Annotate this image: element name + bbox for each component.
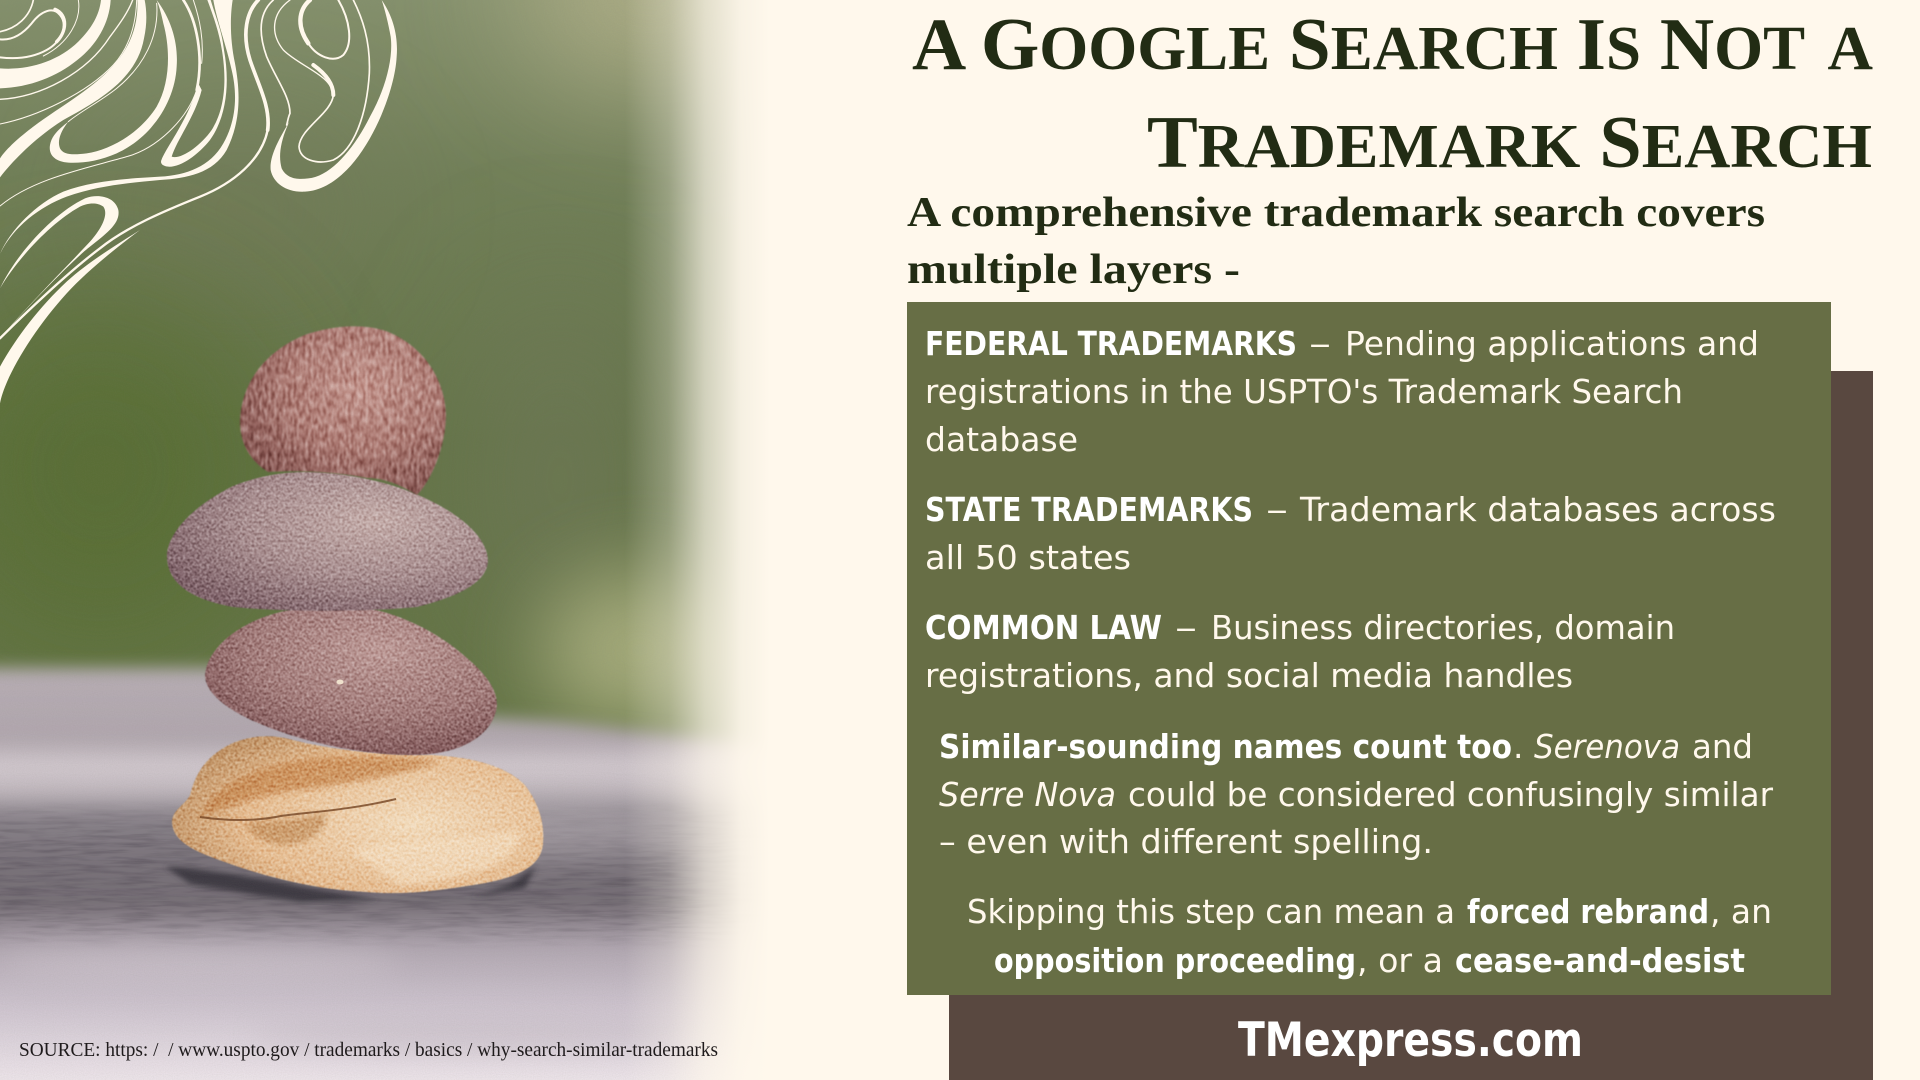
text: federal trademarks bbox=[925, 324, 1759, 459]
text: state trademarks: – bbox=[1266, 490, 1288, 529]
text: common law: Business directories, domain bbox=[1211, 608, 1675, 647]
panel: brown backing block bbox=[949, 371, 1873, 1080]
text: similar-sounding names: Serenova bbox=[1534, 727, 1680, 766]
bottom sandstone bbox=[172, 736, 543, 893]
blurred green backdrop bbox=[0, 0, 746, 746]
photo: stacked stones on a table bbox=[0, 0, 746, 1080]
text: consequences of skipping: opposition proceeding bbox=[994, 941, 1356, 980]
text: consequences of skipping: cease-and-desist bbox=[1455, 941, 1745, 980]
text: common law: registrations, and social media handles bbox=[925, 656, 1573, 695]
text: federal trademarks: database bbox=[925, 420, 1078, 459]
stone shadow bbox=[165, 866, 536, 902]
text: state trademarks bbox=[925, 490, 1776, 577]
text: common law bbox=[925, 608, 1675, 695]
text: consequences of skipping: , an bbox=[1710, 892, 1772, 931]
film grain bbox=[0, 682, 644, 1080]
text: common law: COMMON LAW bbox=[925, 608, 1162, 647]
brand: website: TMexpress.com bbox=[1238, 1013, 1583, 1068]
text: consequences of skipping: , or a bbox=[1357, 941, 1443, 980]
text: state trademarks: all 50 states bbox=[925, 538, 1131, 577]
text: similar-sounding names: – even with different spelling. bbox=[939, 822, 1433, 861]
text: federal trademarks: FEDERAL TRADEMARKS bbox=[925, 324, 1297, 363]
text: federal trademarks: Pending applications and bbox=[1345, 324, 1759, 363]
blurred wooden table bbox=[0, 656, 744, 1080]
text: similar-sounding names: and bbox=[1692, 727, 1753, 766]
text: similar-sounding names: . bbox=[1513, 727, 1524, 766]
subheading: A comprehensive trademark search covers bbox=[907, 190, 1765, 236]
third stone bbox=[205, 606, 497, 755]
text: consequences of skipping: forced rebrand bbox=[1467, 892, 1709, 931]
title bbox=[912, 0, 1873, 187]
text: similar-sounding names bbox=[939, 727, 1773, 861]
text: state trademarks: Trademark databases across bbox=[1299, 490, 1776, 529]
text: consequences of skipping: Skipping this step can mean a bbox=[967, 892, 1455, 931]
decorative swirl lines bbox=[0, 0, 397, 403]
text: similar-sounding names: Serre Nova bbox=[939, 775, 1116, 814]
text: federal trademarks: registrations in the USPTO's Trademark Search bbox=[925, 372, 1683, 411]
text: similar-sounding names: could be considered confusingly similar bbox=[1128, 775, 1773, 814]
text: similar-sounding names: Similar-sounding names count too bbox=[939, 727, 1512, 766]
subheading: multiple layers - bbox=[907, 247, 1240, 293]
subheading bbox=[907, 190, 1765, 293]
text: consequences of skipping bbox=[967, 892, 1772, 980]
fade to cream bbox=[625, 0, 770, 1080]
source citation: SOURCE: https: / / www.uspto.gov / trademarks / basics / why-search-similar-trademarks bbox=[19, 1039, 718, 1061]
text: state trademarks: STATE TRADEMARKS bbox=[925, 490, 1253, 529]
panel: olive content block bbox=[907, 302, 1831, 995]
second stone bbox=[167, 472, 488, 611]
text: federal trademarks: – bbox=[1309, 324, 1331, 363]
title: Trademark Search bbox=[1147, 89, 1872, 187]
text: common law: – bbox=[1175, 608, 1197, 647]
top stone bbox=[240, 326, 446, 495]
